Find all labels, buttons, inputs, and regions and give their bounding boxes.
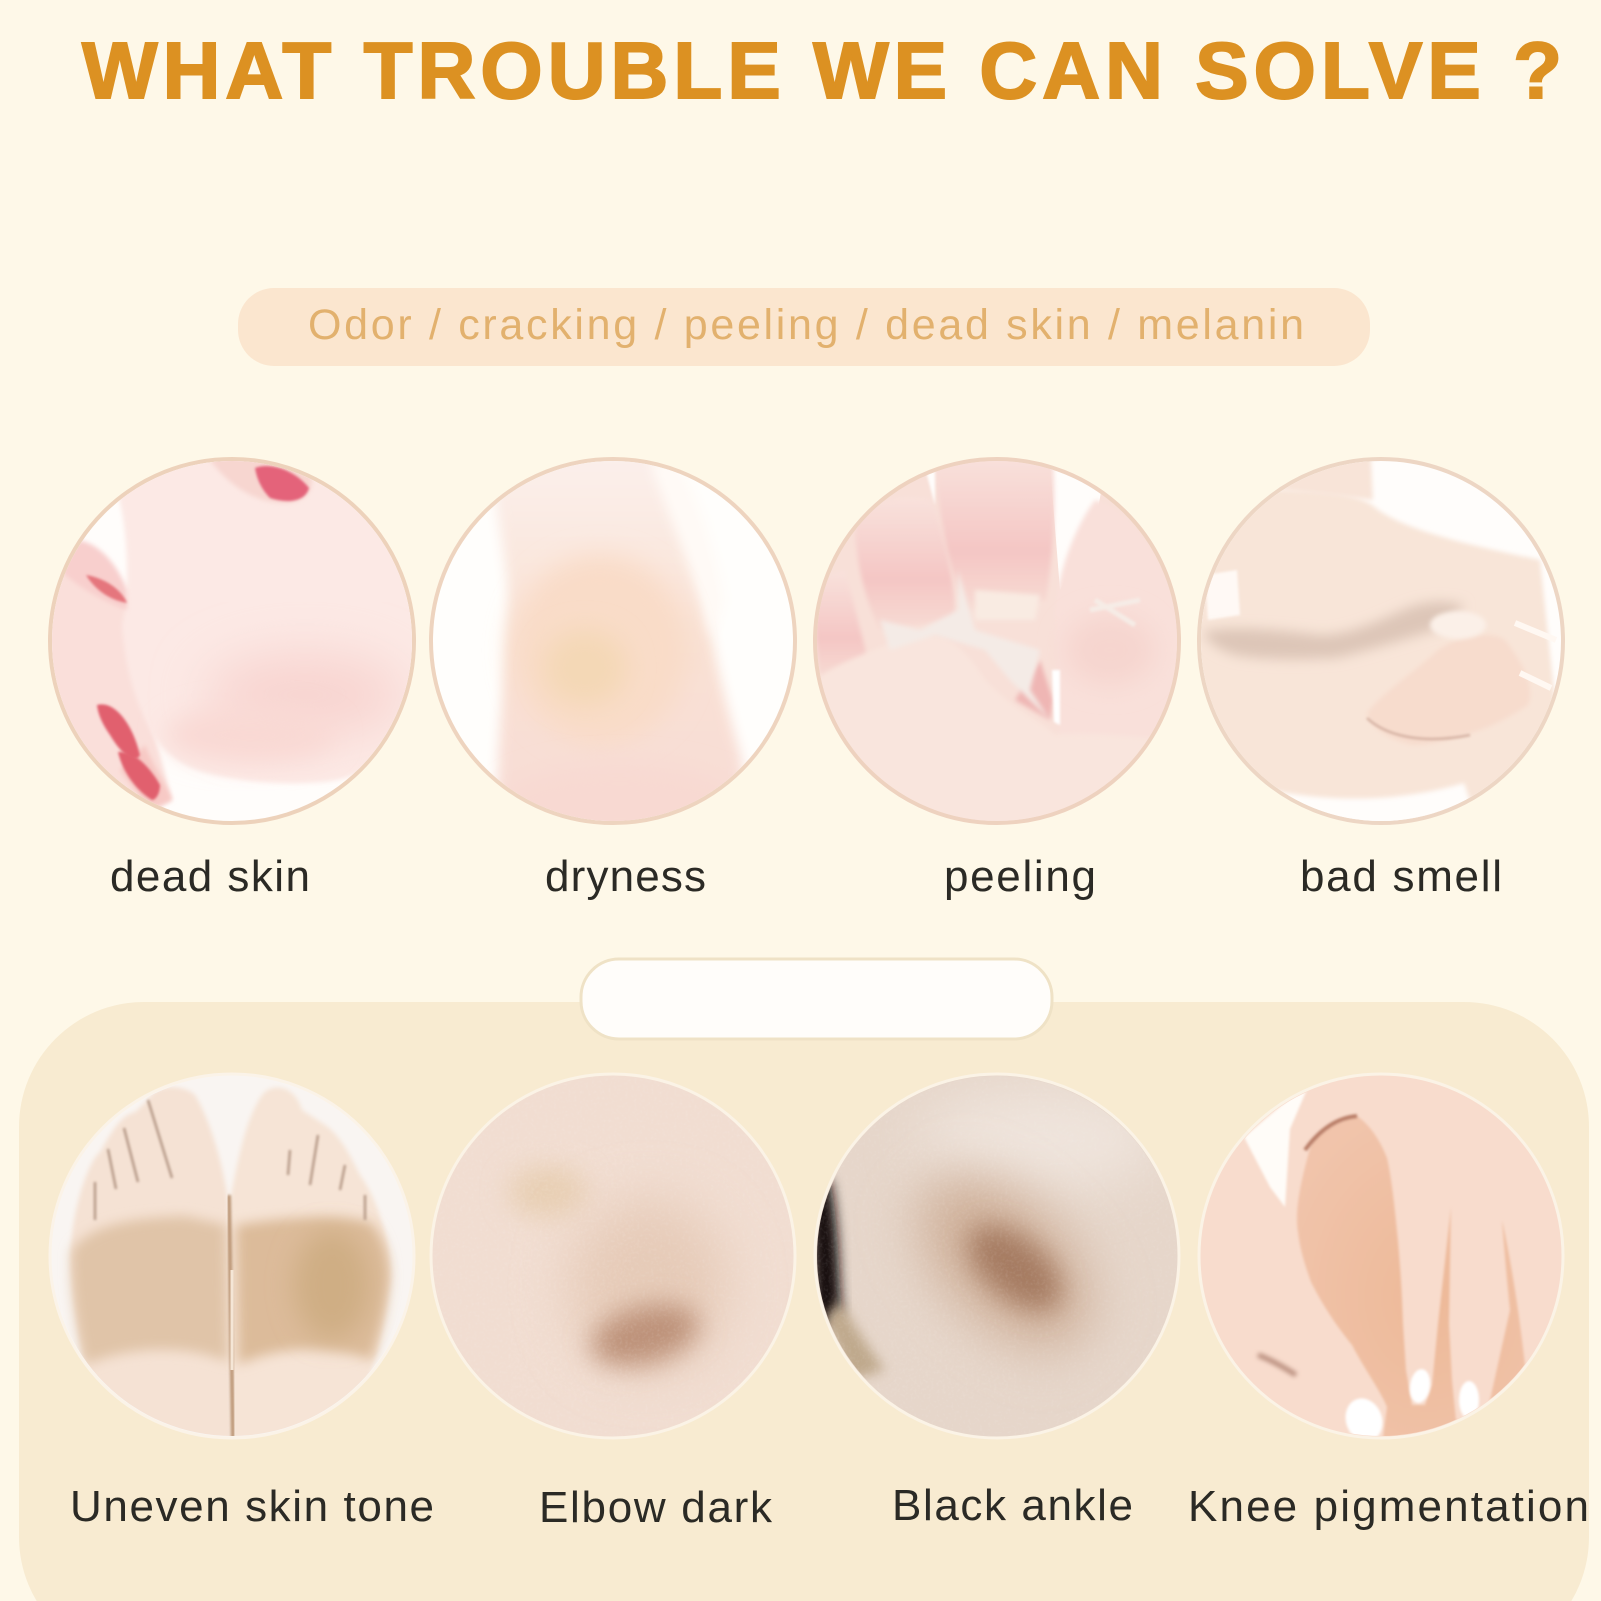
photo: elbow dark [430, 1070, 800, 1440]
title: WHAT TROUBLE WE CAN SOLVE ? [82, 26, 1562, 115]
photo: knee pigmentation [1199, 1074, 1563, 1447]
subtitle pill: Odor / cracking / peeling / dead skin / melanin [308, 301, 1304, 349]
photo: black ankle [810, 1070, 1185, 1440]
photo: dryness [431, 450, 795, 845]
photo: dead skin [40, 440, 420, 830]
label: uneven skin tone: Uneven skin tone [70, 1482, 434, 1531]
label: knee pigmentation: Knee pigmentation [1188, 1482, 1589, 1531]
lower panel [19, 1002, 1589, 1601]
photo: peeling [810, 455, 1190, 840]
photo: uneven skin tone [50, 1074, 414, 1450]
label: dead skin: dead skin [110, 852, 310, 901]
blank pill [581, 959, 1052, 1039]
label: black ankle: Black ankle [892, 1481, 1133, 1530]
label: elbow dark: Elbow dark [539, 1483, 773, 1532]
label: dryness: dryness [545, 852, 706, 901]
label: bad smell: bad smell [1300, 852, 1502, 901]
photo: bad smell [1197, 457, 1565, 825]
subtitle pill [238, 288, 1370, 366]
label: peeling: peeling [944, 852, 1096, 901]
